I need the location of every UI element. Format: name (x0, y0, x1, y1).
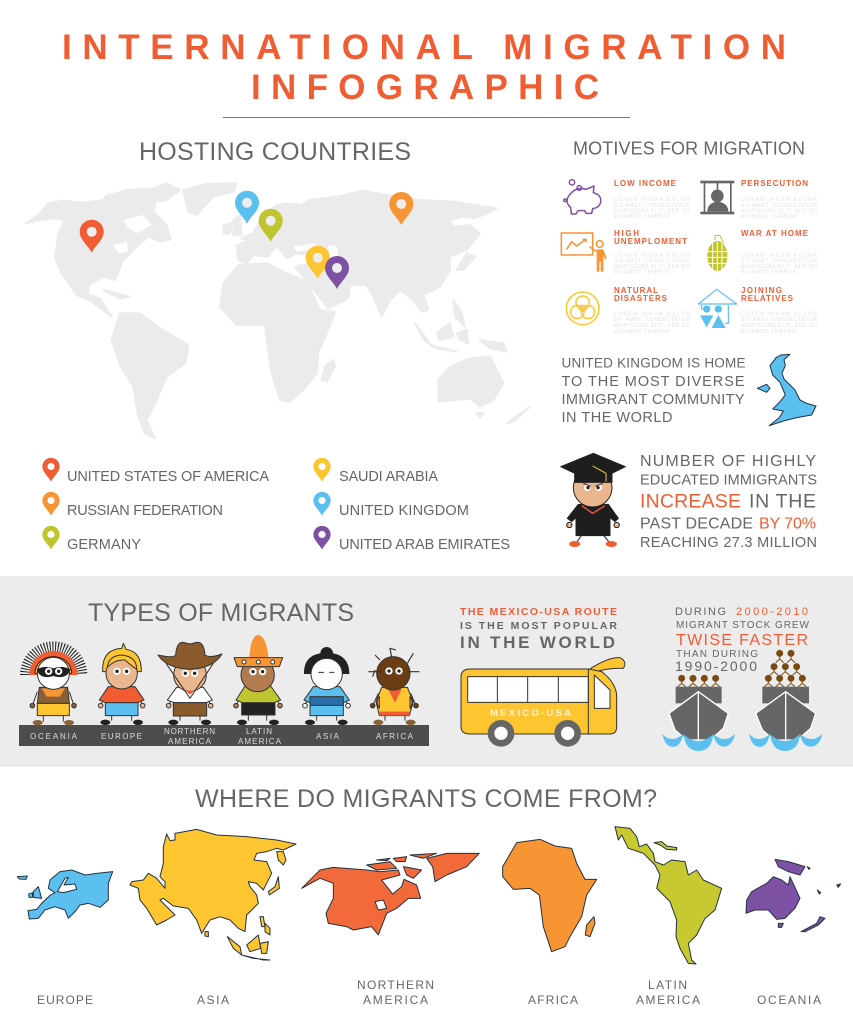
map: Europe (17, 870, 113, 919)
label bar: AMERICA (168, 737, 212, 746)
motive placeholder text (614, 197, 817, 335)
text: United Kingdom diversity: IN THE WORLD (562, 410, 672, 426)
text: Mexico-USA route (460, 606, 617, 652)
text: migrant stock: DURING (675, 606, 726, 618)
text: migrant stock: MIGRANT STOCK GREW (676, 620, 810, 631)
icon: UK map (757, 354, 816, 426)
motive labels: PERSECUTION (741, 179, 808, 188)
bus destination text: MEXICO-USA (490, 708, 571, 719)
motive placeholder text: SIT AMET, CONSECTETUR (741, 203, 817, 209)
character: Latin America (234, 635, 283, 725)
motive placeholder text: EIUSMOD TEMPOR (614, 329, 669, 335)
heading: where do migrants come from: WHERE DO MIGRANTS COME FROM? (195, 785, 657, 813)
text: highly educated immigrants: BY 70% (759, 516, 816, 532)
pin: United Kingdom (235, 191, 259, 224)
legend: hosting countries: UNITED KINGDOM (339, 503, 469, 519)
continent labels: AFRICA (528, 993, 578, 1007)
motive labels: UNEMPLOMENT (614, 237, 687, 246)
motive placeholder text: EIUSMOD TEMPOR (614, 214, 669, 220)
motive labels: RELATIVES (741, 294, 794, 303)
map: Asia (130, 829, 296, 960)
pin: Germany (259, 209, 283, 242)
motive labels: HIGH (614, 229, 639, 238)
text: highly educated immigrants: REACHING 27.3 MILLION (640, 535, 817, 551)
motive placeholder text: ADIPISCING ELIT, SED DO (741, 208, 817, 214)
character: Northern America (158, 642, 222, 725)
continent labels: AMERICA (363, 993, 428, 1007)
motive placeholder text: ADIPISCING ELIT, SED DO (614, 208, 690, 214)
motive placeholder text: LOREM IPSUM DOLOR (614, 197, 690, 203)
label bar: ASIA (316, 732, 340, 741)
label bar: NORTHERN (164, 727, 215, 736)
continent labels: ASIA (197, 993, 229, 1007)
icon: piggy bank (564, 180, 601, 214)
pin: United Arab Emirates (325, 256, 349, 289)
label bar: LATIN (246, 727, 272, 736)
motive placeholder text: EIUSMOD TEMPOR (614, 270, 669, 276)
icon: joining relatives house (698, 289, 737, 328)
text: highly educated immigrants: IN THE (749, 490, 816, 512)
motive placeholder text: LOREM IPSUM DOLOR (614, 253, 690, 259)
motive placeholder text: SIT AMET, CONSECTETUR (614, 203, 690, 209)
motive labels: DISASTERS (614, 294, 668, 303)
motive placeholder text: ADIPISCING ELIT, SED DO (614, 323, 690, 329)
label bar (19, 725, 429, 746)
continent labels: NORTHERN (357, 978, 434, 992)
continent labels: AMERICA (636, 993, 700, 1007)
legend: hosting countries: GERMANY (67, 537, 141, 553)
text: highly educated immigrants: EDUCATED IMMIGRANTS (640, 472, 817, 488)
icon: grenade (707, 235, 727, 271)
motive placeholder text: EIUSMOD TEMPOR (741, 270, 796, 276)
panel: types of migrants band (0, 576, 853, 767)
title: INTERNATIONAL MIGRATION (62, 28, 786, 67)
text: highly educated immigrants (640, 453, 817, 551)
heading: motives for migration: MOTIVES FOR MIGRATION (573, 138, 805, 158)
text: migrant stock (675, 606, 810, 674)
map: Oceania (746, 859, 841, 932)
icon: bus (461, 658, 625, 743)
label bar: AMERICA (238, 737, 282, 746)
text: United Kingdom diversity: UNITED KINGDOM IS HOME (562, 356, 746, 370)
motive placeholder text: ADIPISCING ELIT, SED DO (741, 264, 817, 270)
motive placeholder text: LOREM IPSUM DOLOR (741, 253, 817, 259)
motive labels: JOINING (741, 286, 782, 295)
text: Mexico-USA route: IN THE WORLD (460, 633, 615, 652)
heading: hosting countries: HOSTING COUNTRIES (139, 138, 411, 166)
legend: hosting countries: UNITED STATES OF AMERICA (67, 469, 269, 485)
continent labels: EUROPE (37, 993, 93, 1007)
character: graduate (561, 453, 625, 547)
text: United Kingdom diversity: TO THE MOST DIVERSE (562, 374, 745, 390)
icon: ship with many migrants (749, 650, 822, 751)
motive placeholder text: EIUSMOD TEMPOR (741, 329, 796, 335)
title divider (223, 117, 630, 118)
motive placeholder text: LOREM IPSUM DOLOR (614, 312, 690, 318)
text: highly educated immigrants: NUMBER OF HIGHLY (640, 453, 816, 470)
character: Africa (368, 648, 419, 725)
character: Oceania (26, 647, 82, 725)
text: United Kingdom diversity: IMMIGRANT COMMUNITY (562, 392, 745, 408)
motive placeholder text: ADIPISCING ELIT, SED DO (741, 323, 817, 329)
motive labels: NATURAL (614, 286, 658, 295)
character: Europe (98, 643, 145, 725)
icon: ship with few migrants (662, 675, 735, 751)
label bar: OCEANIA (30, 732, 78, 741)
motive placeholder text: SIT AMET, CONSECTETUR (741, 258, 817, 264)
motive placeholder text: LOREM IPSUM DOLOR (741, 312, 817, 318)
text: United Kingdom diversity (562, 356, 746, 426)
heading: types of migrants: TYPES OF MIGRANTS (88, 599, 354, 627)
text: Mexico-USA route: IS THE MOST POPULAR (460, 620, 617, 632)
pin: Russian Federation (389, 192, 413, 225)
legend: hosting countries: RUSSIAN FEDERATION (67, 503, 223, 519)
motive labels (614, 179, 809, 303)
world map (26, 183, 530, 438)
map: Northern America (302, 853, 479, 935)
pin: Saudi Arabia (306, 246, 330, 279)
text: migrant stock: 1990-2000 (675, 658, 757, 674)
map: Africa (503, 839, 597, 952)
motive placeholder text: SIT AMET, CONSECTETUR (741, 317, 817, 323)
icon: persecution jail (700, 181, 734, 214)
continent labels: OCEANIA (757, 993, 821, 1007)
motive placeholder text: SIT AMET, CONSECTETUR (614, 258, 690, 264)
motive placeholder text: SIT AMET, CONSECTETUR (614, 317, 690, 323)
map: Latin America (615, 827, 722, 964)
motive placeholder text: LOREM IPSUM DOLOR (741, 197, 817, 203)
legend: hosting countries (42, 458, 510, 553)
text: migrant stock: 2000-2010 (736, 606, 808, 618)
motive placeholder text: EIUSMOD TEMPOR (741, 214, 796, 220)
character: Asia (303, 647, 350, 725)
title (62, 28, 786, 107)
icon: biohazard (566, 292, 599, 325)
legend: hosting countries: UNITED ARAB EMIRATES (339, 537, 510, 553)
text: highly educated immigrants: PAST DECADE (640, 516, 753, 532)
text: migrant stock: TWISE FASTER (676, 632, 808, 649)
text: highly educated immigrants: INCREASE (640, 490, 741, 512)
motive labels: LOW INCOME (614, 179, 677, 188)
text: migrant stock: THAN DURING (676, 649, 758, 660)
continent labels: LATIN (648, 978, 687, 992)
text: Mexico-USA route: THE MEXICO-USA ROUTE (460, 606, 617, 618)
continent labels (37, 978, 821, 1007)
legend: hosting countries: SAUDI ARABIA (339, 469, 438, 485)
pin: United States (80, 220, 104, 253)
label bar: EUROPE (101, 732, 142, 741)
label bar: AFRICA (376, 732, 414, 741)
title: INFOGRAPHIC (251, 68, 599, 107)
icon: unemployment chart (561, 233, 607, 272)
motive labels: WAR AT HOME (741, 229, 809, 238)
motive placeholder text: ADIPISCING ELIT, SED DO (614, 264, 690, 270)
